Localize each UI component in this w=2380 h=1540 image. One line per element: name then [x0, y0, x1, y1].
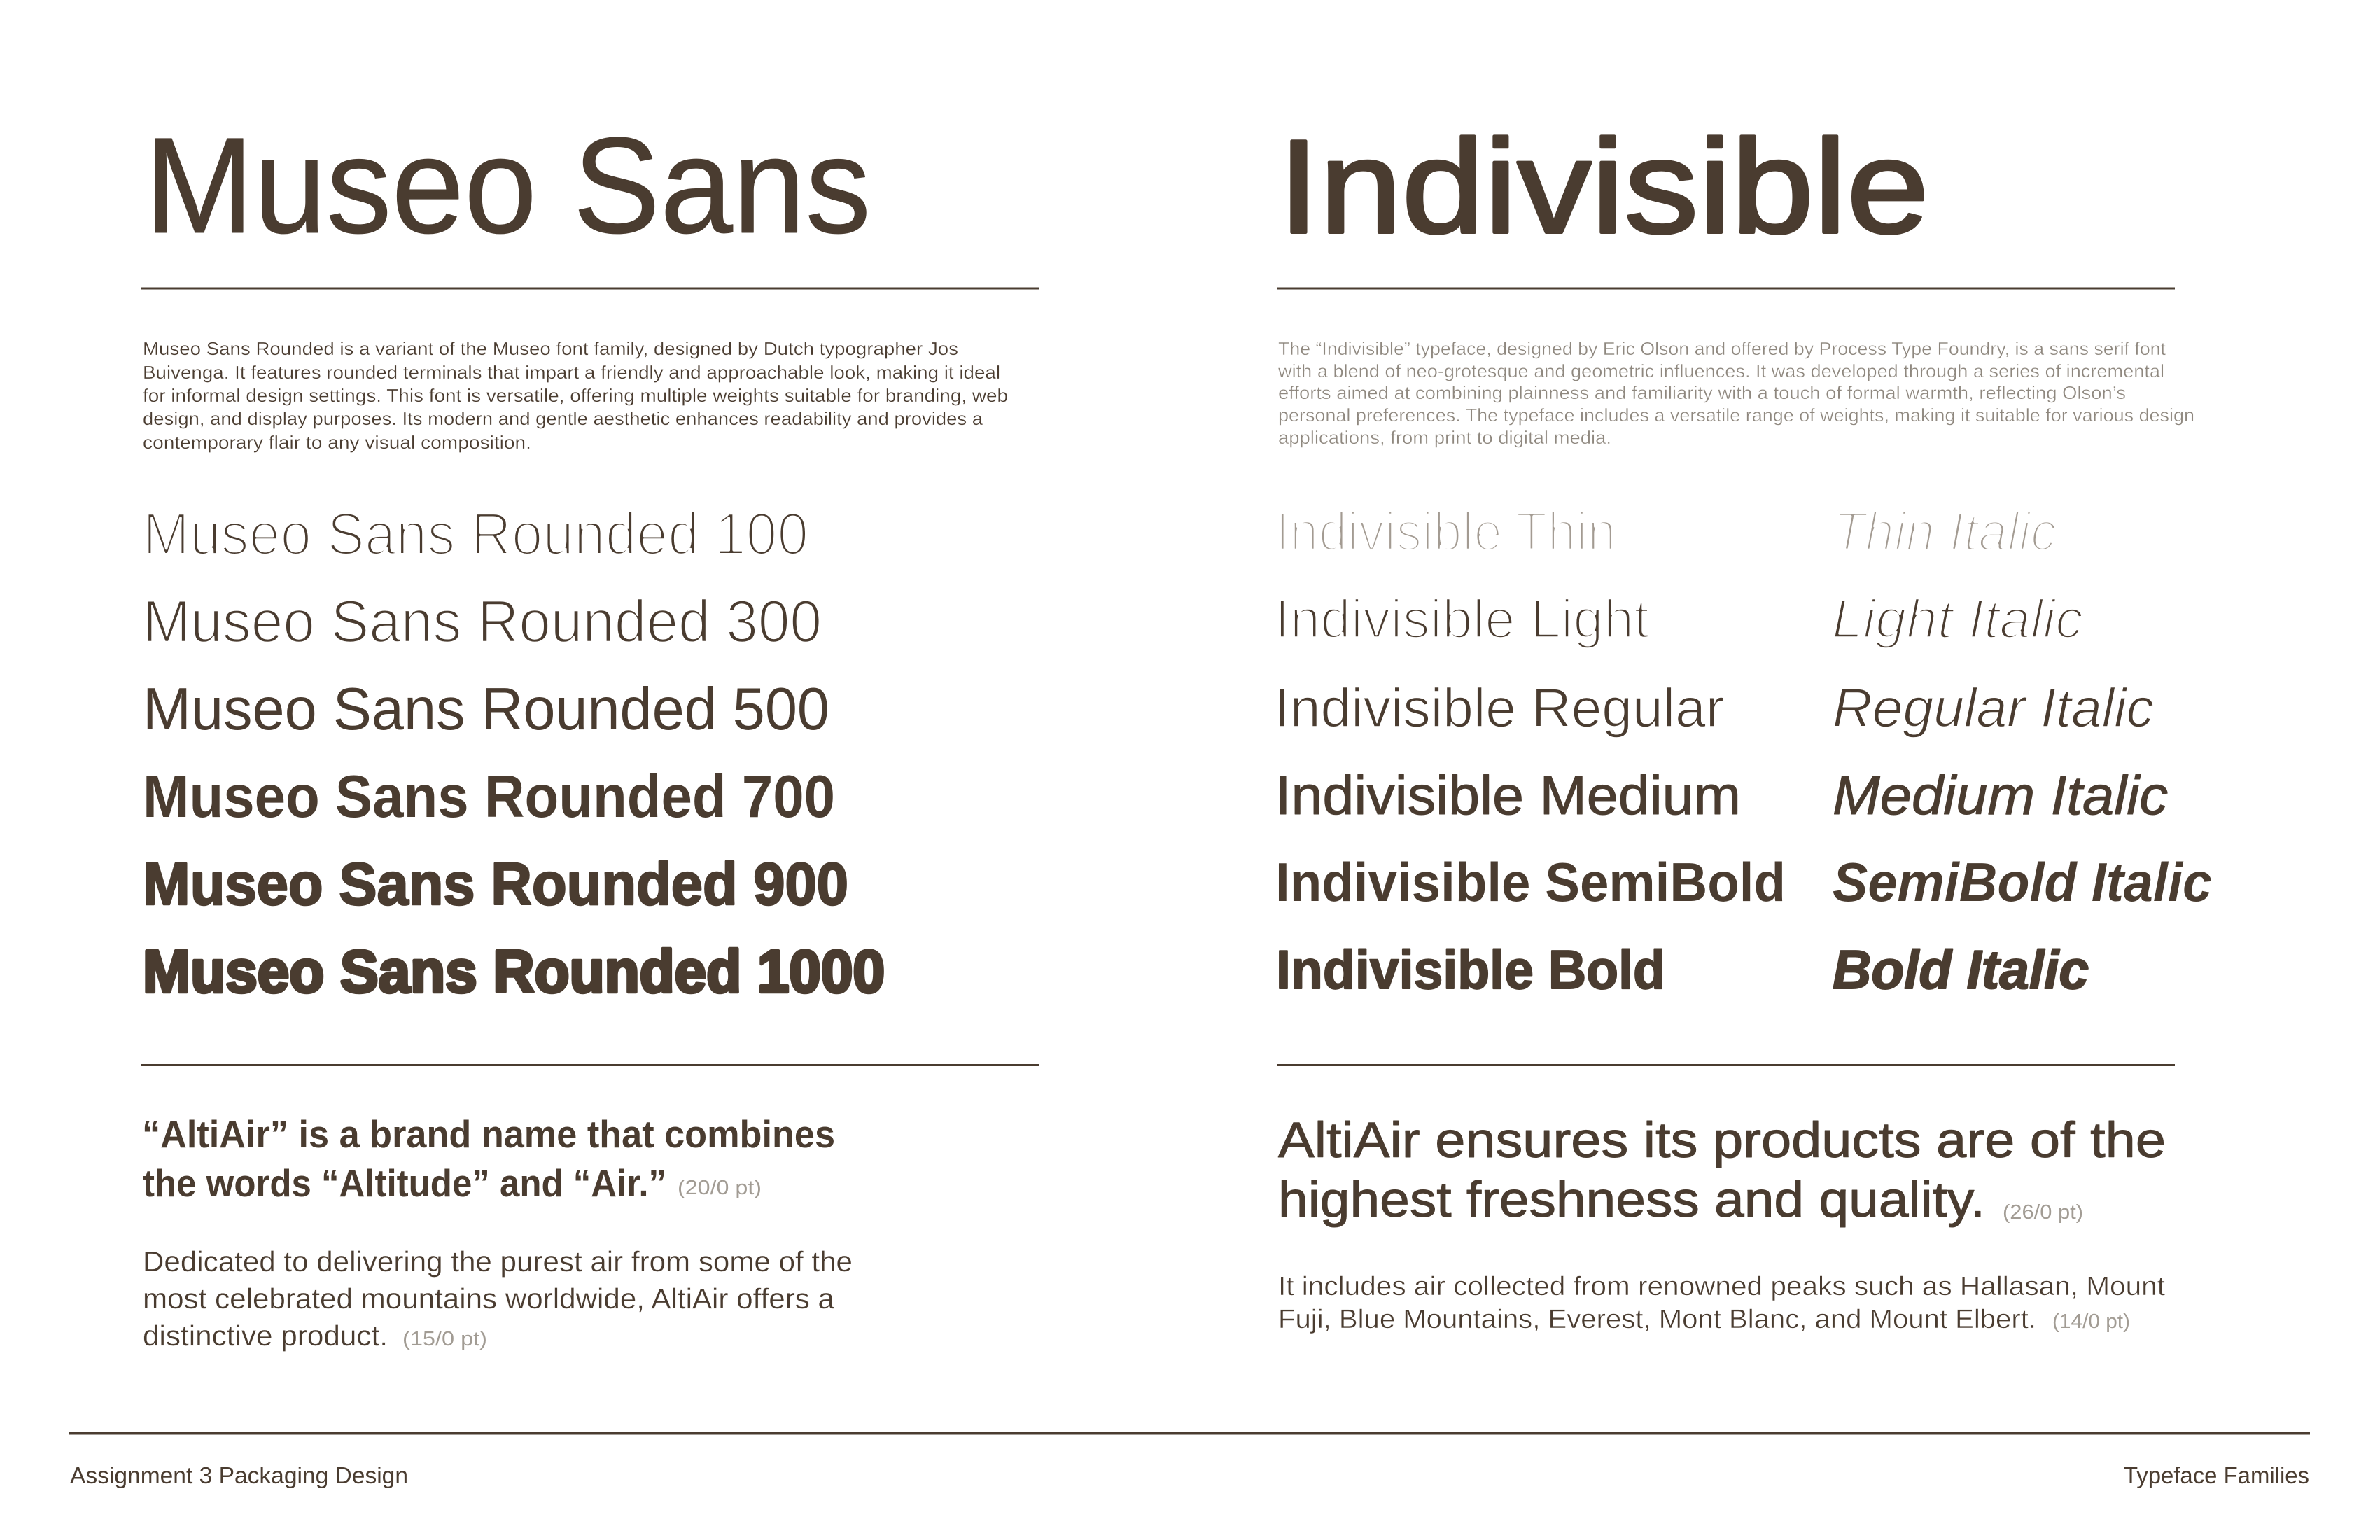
- weight specimen list: Museo Sans Rounded: Museo Sans Rounded 100: [143, 501, 808, 568]
- weight specimen list: Indivisible upright: Indivisible Light: [1275, 588, 1649, 650]
- text block: AltiAir dedication: distinctive product.: [143, 1320, 388, 1352]
- text block: Indivisible description: [1278, 338, 2194, 448]
- headline: AltiAir freshness: [1278, 1113, 2166, 1228]
- weight specimen list: Indivisible italic: SemiBold Italic: [1833, 851, 2212, 913]
- footer: [69, 1432, 2310, 1488]
- footer label: section: Typeface Families: [2124, 1462, 2309, 1488]
- text block: Museo Sans description: contemporary flair to any visual composition.: [143, 432, 531, 453]
- text block: Museo Sans description: for informal design settings. This font is versatile, offering multiple weights suitable for branding, web: [143, 385, 1008, 406]
- weight specimen list: Indivisible italic: Thin Italic: [1833, 500, 2057, 562]
- weight specimen list: Indivisible upright: [1275, 500, 1786, 1000]
- text block: AltiAir dedication: [143, 1245, 853, 1352]
- weight specimen list: Indivisible upright: Indivisible Medium: [1275, 764, 1741, 826]
- heading: Museo Sans: Museo Sans: [145, 109, 871, 262]
- weight specimen list: Indivisible upright: Indivisible Regular: [1275, 677, 1724, 738]
- annotation: 26/0 pt: (26/0 pt): [2003, 1201, 2083, 1224]
- headline: AltiAir freshness: AltiAir ensures its products are of the: [1278, 1113, 2166, 1168]
- panel: Museo Sans: [141, 109, 1039, 1352]
- weight specimen list: Museo Sans Rounded: Museo Sans Rounded 300: [143, 589, 822, 655]
- weight specimen list: Museo Sans Rounded: [143, 501, 885, 1005]
- headline: AltiAir brand name: [142, 1112, 835, 1205]
- weight specimen list: Indivisible italic: Light Italic: [1832, 588, 2083, 650]
- text block: Indivisible description: applications, from print to digital media.: [1278, 427, 1611, 448]
- text block: Museo Sans description: design, and display purposes. Its modern and gentle aesthetic enhances readability and provides a: [143, 408, 983, 429]
- weight specimen list: Indivisible upright: Indivisible Thin: [1275, 500, 1616, 562]
- text block: Indivisible description: personal preferences. The typeface includes a versatile range of weights, making it suitable for various design: [1278, 405, 2194, 426]
- text block: Indivisible description: with a blend of neo-grotesque and geometric influences. It was developed through a series of incremental: [1278, 360, 2164, 382]
- weight specimen list: Museo Sans Rounded: Museo Sans Rounded 700: [143, 764, 835, 830]
- weight specimen list: Indivisible italic: [1832, 500, 2212, 1000]
- headline: AltiAir brand name: the words “Altitude” and “Air.”: [143, 1161, 666, 1205]
- text block: Indivisible description: The “Indivisible” typeface, designed by Eric Olson and offered by Process Type Foundry, is a sans serif font: [1278, 338, 2166, 359]
- weight specimen list: Indivisible italic: Regular Italic: [1833, 677, 2154, 738]
- heading: Indivisible: Indivisible: [1278, 113, 1929, 261]
- footer label: assignment: Assignment 3 Packaging Design: [70, 1462, 408, 1488]
- weight specimen list: Museo Sans Rounded: Museo Sans Rounded 1000: [143, 939, 885, 1005]
- weight specimen list: Indivisible italic: Bold Italic: [1833, 939, 2089, 1000]
- weight specimen list: Indivisible upright: Indivisible SemiBold: [1275, 851, 1786, 913]
- text block: Museo Sans description: Museo Sans Rounded is a variant of the Museo font family, designed by Dutch typographer Jos: [143, 338, 958, 359]
- text block: Museo Sans description: Buivenga. It features rounded terminals that impart a friendly and approachable look, making it ideal: [143, 362, 1000, 383]
- weight specimen list: Museo Sans Rounded: Museo Sans Rounded 900: [143, 851, 848, 918]
- annotation: 14/0 pt: (14/0 pt): [2052, 1310, 2130, 1333]
- headline: AltiAir brand name: “AltiAir” is a brand name that combines: [142, 1112, 835, 1156]
- text block: Indivisible description: efforts aimed at combining plainness and familiarity with a touch of formal warmth, reflecting Olson’s: [1278, 382, 2126, 403]
- weight specimen list: Indivisible italic: Medium Italic: [1833, 764, 2168, 826]
- text block: peaks list: Fuji, Blue Mountains, Everest, Mont Blanc, and Mount Elbert.: [1278, 1305, 2036, 1334]
- headline: AltiAir freshness: highest freshness and quality.: [1278, 1172, 1985, 1228]
- annotation: 20/0 pt: (20/0 pt): [678, 1177, 762, 1199]
- text block: AltiAir dedication: Dedicated to delivering the purest air from some of the: [143, 1245, 853, 1278]
- text block: Museo Sans description: [143, 338, 1008, 453]
- weight specimen list: Museo Sans Rounded: Museo Sans Rounded 500: [143, 676, 830, 743]
- panel: Indivisible: [1275, 113, 2212, 1334]
- text block: peaks list: [1278, 1272, 2165, 1334]
- text block: AltiAir dedication: most celebrated mountains worldwide, AltiAir offers a: [143, 1282, 834, 1315]
- text block: peaks list: It includes air collected from renowned peaks such as Hallasan, Mount: [1278, 1272, 2165, 1301]
- weight specimen list: Indivisible upright: Indivisible Bold: [1276, 939, 1665, 1000]
- annotation: 15/0 pt: (15/0 pt): [402, 1328, 487, 1350]
